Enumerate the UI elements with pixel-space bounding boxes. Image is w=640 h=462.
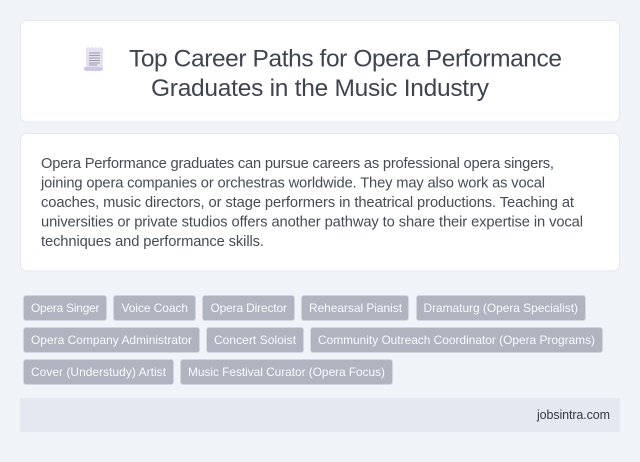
panel: title header	[20, 20, 620, 122]
tag: Community Outreach Coordinator: Community Outreach Coordinator (Opera Programs)	[318, 333, 595, 347]
tag: Opera Singer	[24, 296, 106, 320]
tag: Opera Director	[202, 296, 294, 320]
tag: Voice Coach	[114, 296, 196, 320]
title: Graduates in the Music Industry	[151, 75, 490, 102]
footer site name: jobsintra.com	[536, 408, 610, 422]
description text: coaches, music directors, or stage performers in theatrical productions. Teaching at	[41, 195, 574, 211]
tag: Opera Director: Opera Director	[210, 301, 287, 315]
tag: Opera Singer: Opera Singer	[31, 301, 100, 315]
tag: Voice Coach: Voice Coach	[122, 301, 188, 315]
icon: paper scroll	[84, 47, 103, 71]
tag: Dramaturg	[416, 296, 586, 320]
title: Top Career Paths for Opera Performance	[129, 46, 562, 72]
tag: Opera Company Administrator: Opera Company Administrator	[31, 333, 192, 347]
tag: Concert Soloist: Concert Soloist	[214, 333, 297, 347]
description text: techniques and performance skills.	[41, 234, 264, 250]
tag: Rehearsal Pianist: Rehearsal Pianist	[309, 301, 403, 315]
tag: Concert Soloist	[206, 328, 304, 352]
career tags	[24, 296, 602, 384]
description text: Opera Performance graduates can pursue careers as professional opera singers,	[41, 156, 554, 172]
tag: Dramaturg: Dramaturg (Opera Specialist)	[424, 301, 578, 315]
description text: joining opera companies or orchestras worldwide. They may also work as vocal	[40, 176, 545, 192]
description text: universities or private studios offers another pathway to share their expertise in vocal	[41, 214, 583, 230]
description text	[40, 156, 583, 250]
tag: Cover (Understudy) Artist: Cover (Understudy) Artist	[31, 365, 167, 379]
tag: Rehearsal Pianist	[302, 296, 408, 320]
tag: Opera Company Administrator	[24, 328, 200, 352]
tag: Music Festival Curator: Music Festival Curator (Opera Focus)	[188, 365, 385, 379]
tag: Music Festival Curator	[180, 360, 392, 384]
tag: Cover (Understudy) Artist	[24, 360, 174, 384]
footer bar	[20, 398, 620, 432]
panel: description	[20, 134, 620, 271]
title	[129, 46, 562, 102]
tag: Community Outreach Coordinator	[310, 328, 602, 352]
